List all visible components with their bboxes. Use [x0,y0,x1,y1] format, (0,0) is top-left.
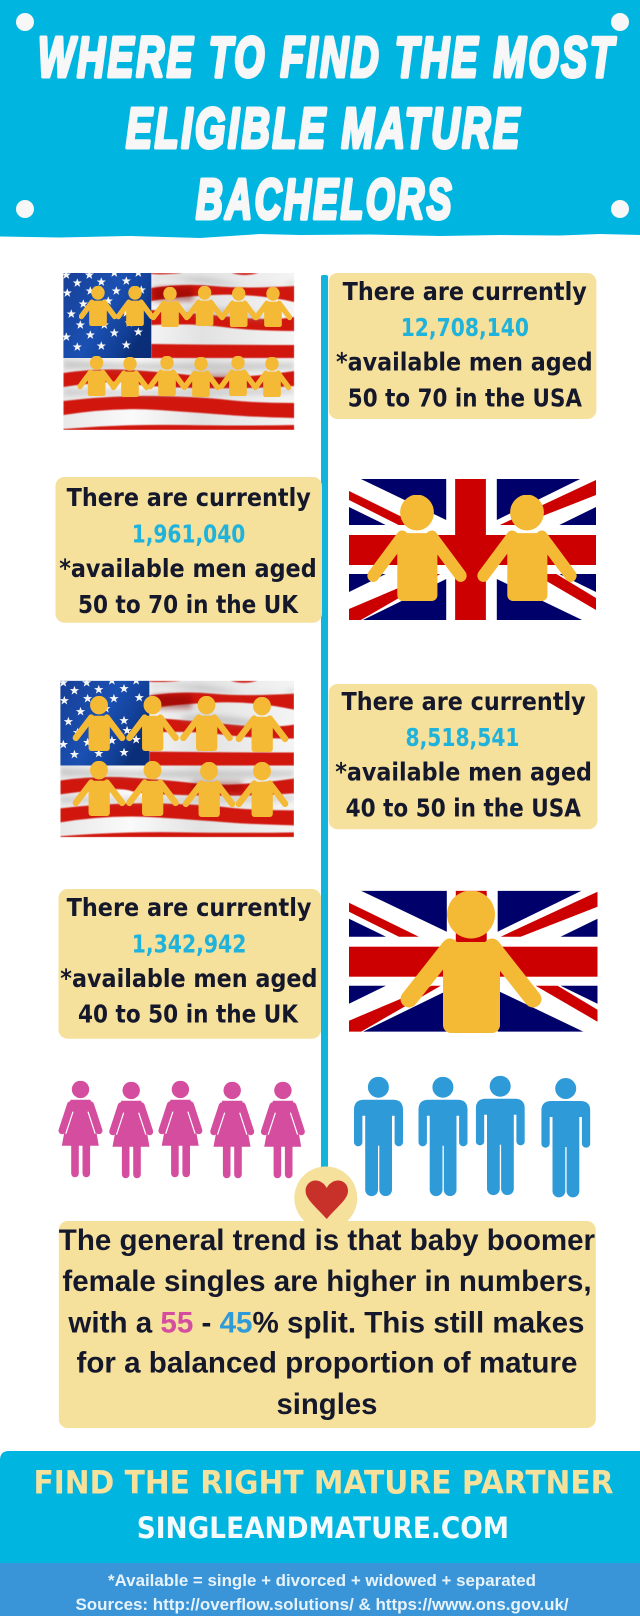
panel: 1,342,942 UK aged 40 to 50: There are currently [67,893,311,922]
panel: 12,708,140 USA aged 50 to 70: 50 to 70 in the USA [348,384,583,413]
title: BACHELORS [196,168,454,232]
icons: five women [62,1081,301,1178]
image: US flag with twelve paper figures [62,268,294,430]
title [38,26,616,232]
footer call to action [0,1451,640,1564]
panel: 12,708,140 USA aged 50 to 70: *available men aged [336,348,593,377]
panel: 8,518,541 USA aged 40 to 50 [329,684,598,829]
icon: heart badge [294,1166,357,1230]
panel: 1,342,942 UK aged 40 to 50 [58,889,321,1039]
header corner dots [16,13,629,218]
image: UK flag with two figures [349,479,596,620]
panel: 12,708,140 USA aged 50 to 70 [329,273,596,419]
footer call to action: SINGLEANDMATURE.COM [137,1511,509,1545]
panel: 1,961,040 UK aged 50 to 70: There are currently [67,483,311,512]
panel: general trend summary: singles [276,1388,377,1421]
panel: 8,518,541 USA aged 40 to 50: There are currently [342,687,586,716]
panel: general trend summary: with a 55 - 45% split. This still makes [67,1306,584,1339]
panel: general trend summary: female singles are higher in numbers, [62,1265,592,1298]
panel: 1,961,040 UK aged 50 to 70: *available men aged [59,554,317,583]
footer sources note: Sources: http://overflow.solutions/ & https://www.ons.gov.uk/ [76,1596,569,1614]
central timeline line [321,275,328,1170]
panel: general trend summary [59,1221,596,1428]
footer sources note [0,1563,640,1616]
panel: 1,961,040 UK aged 50 to 70: 50 to 70 in the UK [78,590,299,619]
panel: 12,708,140 USA aged 50 to 70: 12,708,140 [401,313,529,342]
panel: 1,342,942 UK aged 40 to 50: 1,342,942 [132,930,246,959]
image: US flag with eight paper figures [59,676,294,837]
header banner [0,0,640,238]
image: UK flag with one figure [349,890,598,1033]
panel: 1,342,942 UK aged 40 to 50: *available men aged [60,964,318,993]
panel: 1,961,040 UK aged 50 to 70: 1,961,040 [132,520,245,549]
icons: four men [354,1076,590,1197]
panel: 1,961,040 UK aged 50 to 70 [56,477,322,623]
panel: 8,518,541 USA aged 40 to 50: 8,518,541 [406,723,520,752]
panel: 8,518,541 USA aged 40 to 50: 40 to 50 in the USA [346,794,582,823]
panel: 12,708,140 USA aged 50 to 70: There are currently [343,277,587,306]
panel: 1,342,942 UK aged 40 to 50: 40 to 50 in the UK [78,1000,299,1029]
panel: 8,518,541 USA aged 40 to 50: *available men aged [335,758,592,787]
footer sources note: *Available = single + divorced + widowed + separated [108,1572,536,1590]
panel: general trend summary: The general trend is that baby boomer [59,1224,596,1257]
panel: general trend summary: for a balanced proportion of mature [76,1347,577,1380]
